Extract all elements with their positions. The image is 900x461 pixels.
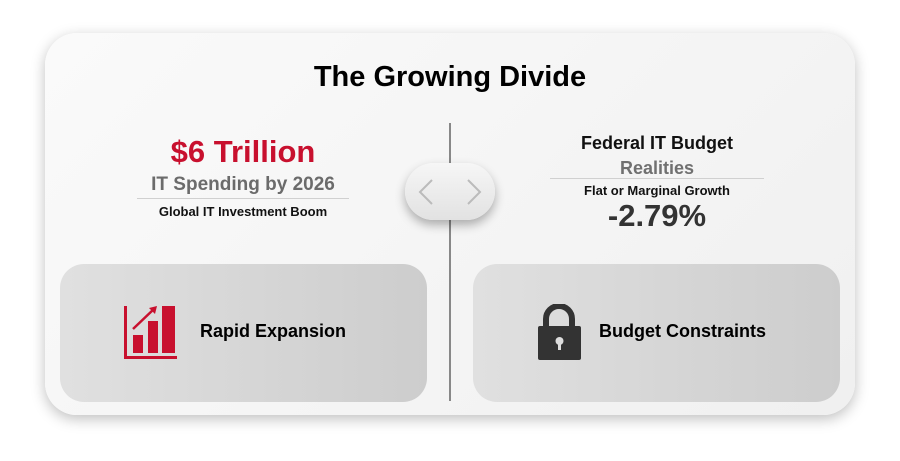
caption: Global IT Investment Boom (159, 204, 327, 219)
toggle pill (405, 163, 495, 220)
title: The Growing Divide (314, 61, 586, 93)
left stat block (137, 134, 349, 219)
subtitle: IT Spending by 2026 (151, 174, 335, 195)
panel: rapid expansion (60, 264, 427, 402)
caption: Flat or Marginal Growth (584, 183, 730, 198)
heading: Federal IT Budget (581, 133, 733, 153)
percentage: -2.79% (608, 198, 706, 233)
subheading: Realities (620, 158, 694, 178)
divider line (449, 123, 451, 401)
right stat block (550, 133, 764, 233)
big number: $6 Trillion (171, 134, 315, 169)
label: Budget Constraints (599, 321, 766, 341)
label: Rapid Expansion (200, 321, 346, 341)
card (45, 33, 855, 415)
panel: budget constraints (473, 264, 840, 402)
icon: lock (538, 304, 581, 360)
icon: bar chart (124, 306, 177, 359)
